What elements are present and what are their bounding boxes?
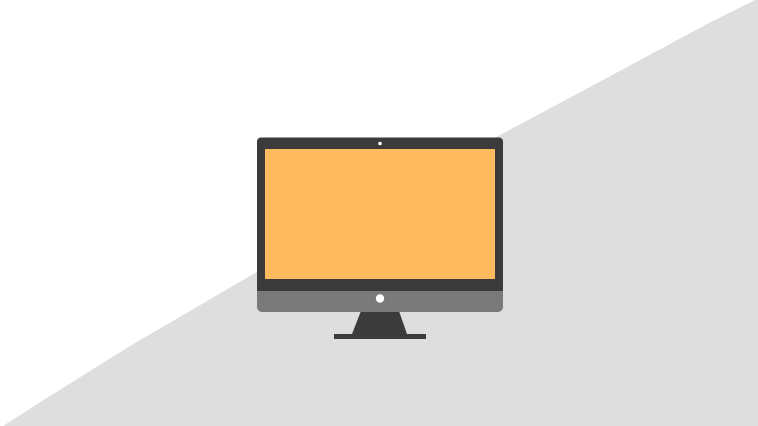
- orange screen: [265, 149, 495, 279]
- power button: [376, 294, 384, 303]
- monitor chin: [257, 291, 503, 312]
- icon: desktop monitor: [257, 138, 503, 339]
- monitor bezel: [257, 138, 503, 291]
- monitor stand: [334, 311, 426, 339]
- webcam dot: [378, 142, 382, 145]
